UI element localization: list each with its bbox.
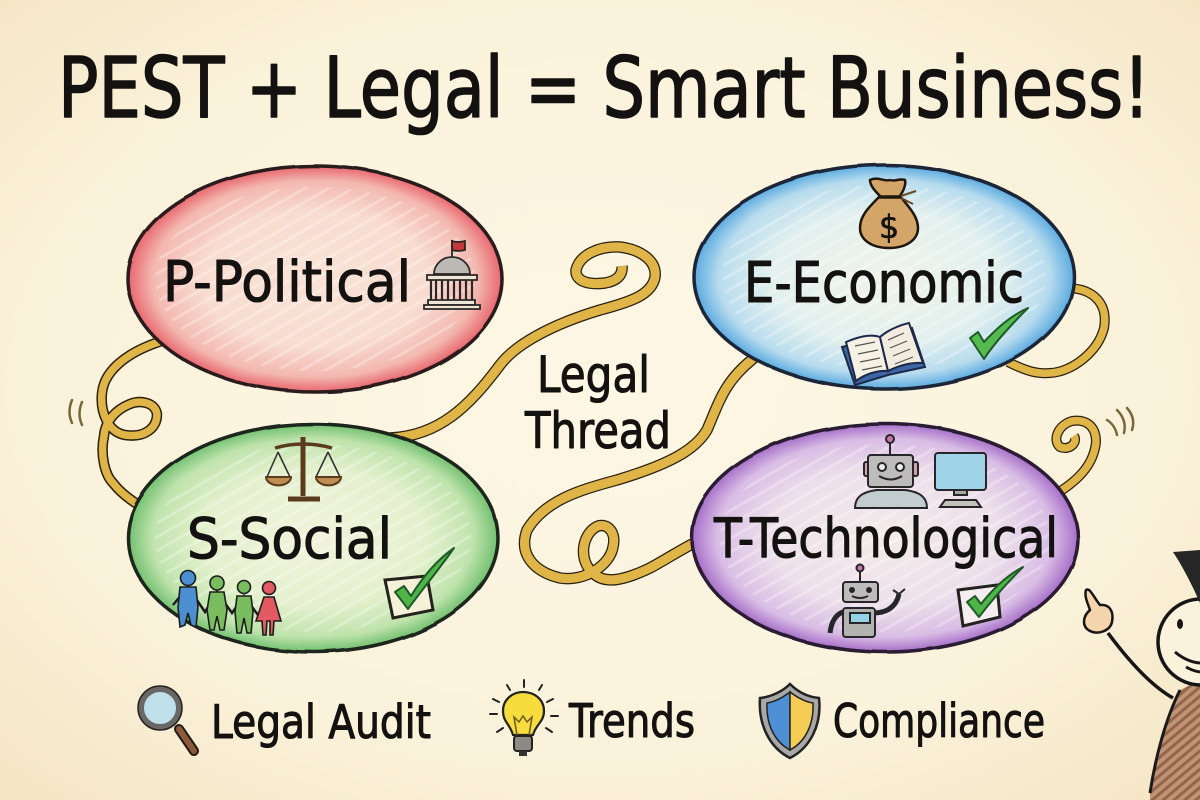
icon: magnifier (138, 686, 194, 751)
icon: checkbox with check (958, 567, 1023, 626)
label: E-Economic: E-Economic (744, 251, 1024, 316)
panel: technological (692, 424, 1078, 652)
icon: checkbox with check (385, 548, 454, 618)
icon: government building (424, 240, 480, 309)
legend: compliance: Compliance (833, 694, 1045, 748)
character: teacher pointing (1084, 550, 1200, 800)
label: P-Political: P-Political (163, 250, 411, 315)
panel: political (128, 166, 502, 392)
legal thread ribbon (102, 247, 1105, 580)
label: S-Social: S-Social (187, 507, 392, 572)
icon: scales (266, 437, 341, 499)
label: Legal Thread (524, 346, 671, 460)
panel: economic (694, 165, 1074, 389)
icon: check mark (970, 308, 1028, 359)
legend: legal audit (138, 686, 431, 751)
label: Legal Thread: Thread (524, 402, 671, 460)
icon: robot and monitor (855, 435, 986, 508)
label: T-Technological: T-Technological (713, 507, 1058, 570)
label: Legal Thread: Legal (537, 346, 650, 404)
legend: trends: Trends (568, 694, 695, 748)
legend: compliance (760, 684, 1045, 758)
icon: shield (760, 684, 819, 758)
legend: legal audit: Legal Audit (211, 695, 431, 749)
icon: money bag: $ (879, 208, 899, 246)
icon: small robot (830, 564, 905, 637)
motion marks (70, 400, 1133, 435)
legend: trends (490, 680, 695, 756)
icon: open book (842, 323, 925, 385)
icon: people (173, 570, 281, 635)
panel: social (128, 424, 498, 652)
icon: light bulb (490, 680, 558, 756)
icon: money bag (860, 179, 918, 248)
